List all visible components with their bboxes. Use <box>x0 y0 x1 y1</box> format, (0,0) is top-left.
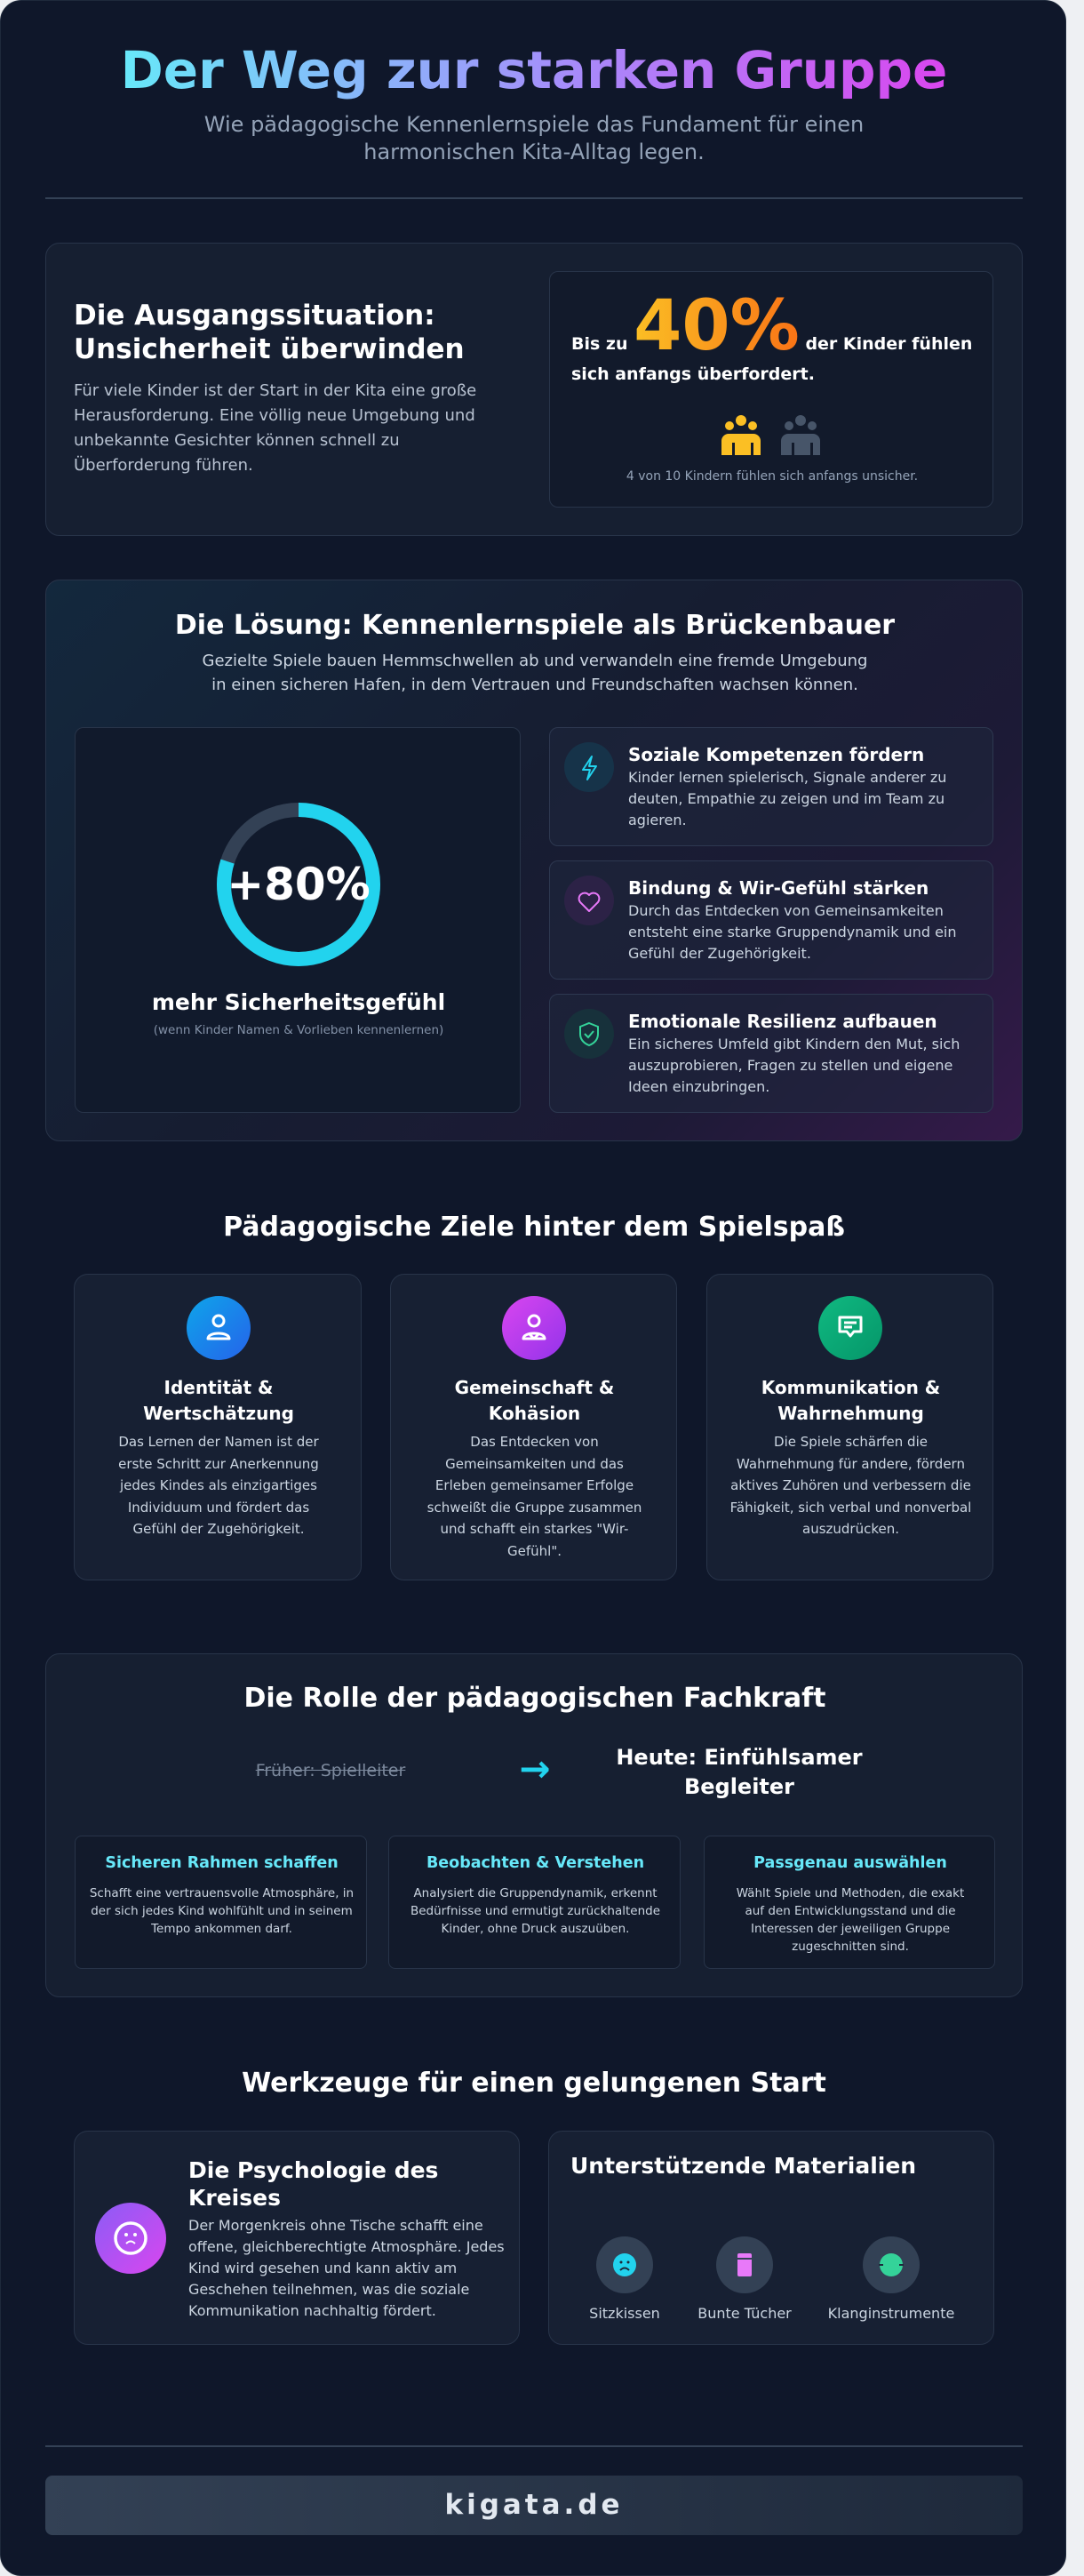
stat: +80%: +80% <box>227 859 371 910</box>
card: Passgenau: Passgenau auswählen <box>753 1854 947 1872</box>
card: Gemeinschaft: Gemeinschaft & <box>455 1377 614 1398</box>
card: Passgenau <box>704 1836 995 1969</box>
item: Bindung: Durch das Entdecken von Gemeinsamkeiten entsteht eine starke Gruppendynamik und ein Gefühl der Zugehörigkeit. <box>628 902 957 962</box>
item: Resilienz: Ein sicheres Umfeld gibt Kindern den Mut, sich auszuprobieren, Fragen zu stellen und eigene Ideen einzubringen. <box>628 1036 960 1095</box>
item: Bindung: Bindung & Wir-Gefühl stärken <box>628 877 929 899</box>
card: Materialien: Unterstützende Materialien <box>570 2153 916 2179</box>
heading: Werkzeuge: Werkzeuge für einen gelungenen Start <box>242 2068 826 2099</box>
subtitle: Lösung: Gezielte Spiele bauen Hemmschwellen ab und verwandeln eine fremde Umgebung <box>203 652 867 670</box>
subtitle: Lösung: in einen sicheren Hafen, in dem Vertrauen und Freundschaften wachsen können. <box>211 676 858 694</box>
heading: Rolle: Die Rolle der pädagogischen Fachkraft <box>243 1683 826 1714</box>
heading: Pädagogische Ziele: Pädagogische Ziele hinter dem Spielspaß <box>223 1212 845 1243</box>
card: Kommunikation <box>706 1274 993 1580</box>
icon: lightning <box>564 742 614 792</box>
subtitle: Lösung <box>203 652 867 694</box>
card: Sicheren Rahmen: Schafft eine vertrauensvolle Atmosphäre, in der sich jedes Kind wohlfühlt und in seinem Tempo ankommen darf. <box>90 1886 354 1936</box>
icon: person blue <box>187 1296 251 1360</box>
caption: (wenn Kinder Namen & Vorlieben kennenlernen) <box>154 1023 443 1037</box>
subtitle: Wie pädagogische Kennenlernspiele das Fundament für einen harmonischen Kita-Alltag legen. <box>204 112 864 164</box>
card: Psychologie des Kreises: Der Morgenkreis ohne Tische schafft eine offene, gleichberechtigte Atmosphäre. Jedes Kind wird gesehen und kann aktiv am Geschehen teilnehmen, was die soziale Kommunikation nachhaltig fördert. <box>188 2217 505 2319</box>
icon: people <box>721 415 820 455</box>
icon: Klanginstrumente <box>828 2236 954 2322</box>
card: Identität: Das Lernen der Namen ist der erste Schritt zur Anerkennung jedes Kindes als einzigartiges Individuum und fördert das Gefühl der Zugehörigkeit. <box>118 1434 319 1537</box>
card: Identität: Wertschätzung <box>143 1403 294 1424</box>
item: Resilienz <box>549 994 993 1113</box>
card: Identität: Identität & <box>163 1377 274 1398</box>
card: Gemeinschaft: Das Entdecken von Gemeinsamkeiten und das Erleben gemeinsamer Erfolge schweißt die Gruppe zusammen und schafft ein starkes "Wir-Gefühl". <box>427 1434 642 1559</box>
icon: person purple <box>502 1296 566 1360</box>
text: Früher: Früher: Spielleiter <box>256 1761 405 1780</box>
item: Soziale Kompetenzen: Kinder lernen spielerisch, Signale anderer zu deuten, Empathie zu zeigen und im Team zu agieren. <box>628 769 946 828</box>
card: Kommunikation: Wahrnehmung <box>777 1403 924 1424</box>
footer: kigata.de <box>45 2476 1023 2535</box>
card: Psychologie des Kreises <box>74 2131 520 2345</box>
panel: Rolle der Fachkraft <box>45 1653 1023 1997</box>
card: Sicheren Rahmen: Sicheren Rahmen schaffen <box>105 1854 339 1872</box>
icon: shield <box>564 1009 614 1059</box>
card: Gemeinschaft <box>390 1274 677 1580</box>
icon: chat <box>818 1296 882 1360</box>
chart: 80% ring <box>75 727 521 1113</box>
icon: Sitzkissen <box>589 2236 660 2322</box>
stat: 40 percent: Bis zu 40% der Kinder fühlen sich anfangs überfordert. <box>571 286 972 384</box>
card: Kommunikation: Die Spiele schärfen die Wahrnehmung für andere, fördern aktives Zuhören und verbessern die Fähigkeit, sich verbal und nonverbal auszudrücken. <box>730 1434 971 1537</box>
card: Gemeinschaft: Kohäsion <box>489 1403 580 1424</box>
panel: Lösung <box>45 580 1023 1141</box>
card: Psychologie des Kreises: Die Psychologie des Kreises <box>188 2157 438 2211</box>
item: Bindung <box>549 860 993 980</box>
text: Heute: Heute: Einfühlsamer Begleiter <box>616 1745 863 1799</box>
footer: kigata.de: kigata.de <box>444 2489 624 2521</box>
icon: Klanginstrumente: Klanginstrumente <box>828 2305 954 2322</box>
card: Passgenau: Wählt Spiele und Methoden, die exakt auf den Entwicklungsstand und die Interessen der jeweiligen Gruppe zugeschnitten sind. <box>737 1886 964 1954</box>
item: Soziale Kompetenzen <box>549 727 993 846</box>
panel: Ausgangssituation <box>45 243 1023 536</box>
card: Kommunikation: Kommunikation & <box>761 1377 940 1398</box>
icon: Bunte Tücher <box>697 2236 792 2322</box>
icon: Bunte Tücher: Bunte Tücher <box>697 2305 792 2322</box>
icon: circle face <box>95 2203 166 2274</box>
card: Beobachten: Analysiert die Gruppendynamik, erkennt Bedürfnisse und ermutigt zurückhaltende Kinder, ohne Druck auszuüben. <box>410 1886 660 1936</box>
card: Identität <box>74 1274 362 1580</box>
card: Beobachten <box>388 1836 681 1969</box>
arrow: → <box>519 1747 551 1790</box>
caption: 4 von 10 Kindern fühlen sich anfangs unsicher. <box>626 469 918 484</box>
card: Sicheren Rahmen <box>75 1836 367 1969</box>
item: Resilienz: Emotionale Resilienz aufbauen <box>628 1011 937 1032</box>
label: mehr Sicherheitsgefühl: mehr Sicherheitsgefühl <box>152 989 445 1015</box>
icon: heart <box>564 876 614 925</box>
item: Soziale Kompetenzen: Soziale Kompetenzen fördern <box>628 744 924 765</box>
icon: Sitzkissen: Sitzkissen <box>589 2305 660 2322</box>
title: Der Weg zur starken Gruppe <box>121 40 947 100</box>
heading: Ausgangssituation: Die Ausgangssituation: Unsicherheit überwinden <box>74 300 465 365</box>
heading: Lösung: Die Lösung: Kennenlernspiele als Brückenbauer <box>175 610 895 641</box>
text: Ausgangssituation: Für viele Kinder ist der Start in der Kita eine große Herausforderung. Eine völlig neue Umgebung und unbekannte Gesichter können schnell zu Überforderung führen. <box>74 381 476 475</box>
card: Beobachten: Beobachten & Verstehen <box>426 1854 644 1872</box>
stat box: 40% <box>549 271 993 508</box>
card: Materialien <box>548 2131 994 2345</box>
